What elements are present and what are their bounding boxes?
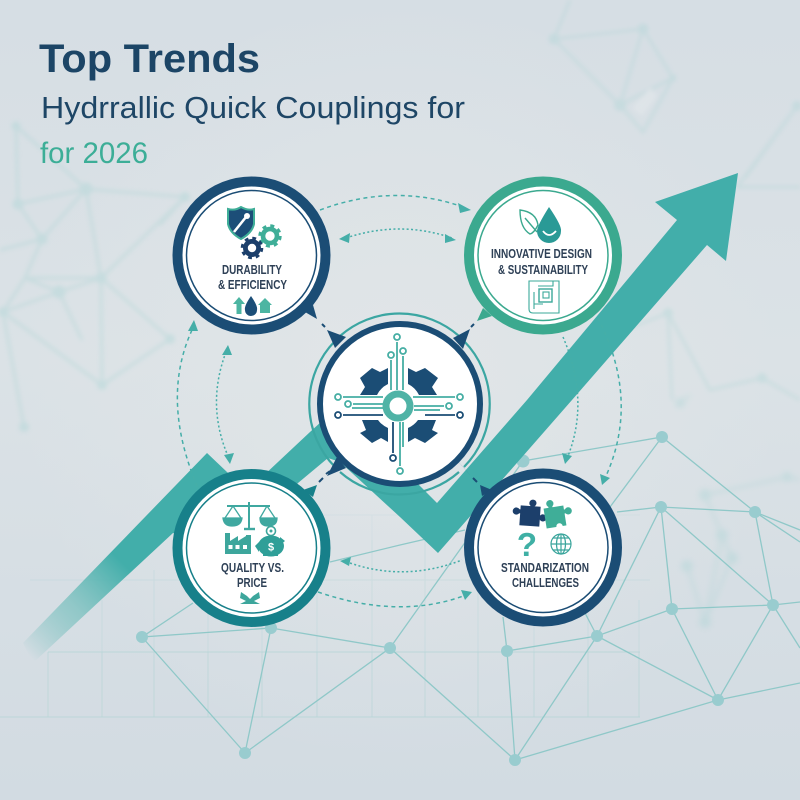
title: Top Trends xyxy=(39,37,260,81)
icon: piggy bank and coin: $ xyxy=(268,542,274,554)
panel: standardization challenges: CHALLENGES xyxy=(512,576,579,590)
panel: standardization challenges xyxy=(469,474,617,622)
icon: green puzzle piece xyxy=(542,497,574,532)
icon: question mark: ? xyxy=(517,526,537,563)
icon: blueprint chip xyxy=(529,281,559,313)
panel: central hub xyxy=(309,314,490,494)
connector tails and dashes xyxy=(303,305,492,497)
label: standardization challenges: STANDARIZATION xyxy=(501,561,589,575)
label: innovative design and sustainability: INNOVATIVE DESIGN xyxy=(491,247,592,261)
icon: piggy bank and coin xyxy=(255,526,285,556)
panel: durability and efficiency xyxy=(178,182,326,330)
panel: durability and efficiency: & EFFICIENCY xyxy=(218,278,288,292)
subtitle: Hydrrallic Quick Couplings for xyxy=(41,90,465,125)
icon: factory xyxy=(225,533,251,554)
icon: gear with circuit xyxy=(335,334,463,474)
icon: dark gear xyxy=(242,238,262,258)
background network: foreground lines xyxy=(136,431,800,766)
icon: shield with wrench xyxy=(228,207,254,239)
hub broken outer ring xyxy=(309,314,490,494)
icon: handshake xyxy=(240,592,260,604)
icon: scales xyxy=(223,502,277,529)
dashed cycle arrows xyxy=(177,195,621,607)
icon: leaf xyxy=(520,210,538,234)
panel: innovative design and sustainability: & SUSTAINABILITY xyxy=(498,263,589,277)
panel: innovative design and sustainability xyxy=(469,182,617,330)
background network: top right blurred xyxy=(548,0,800,400)
label: quality vs price: QUALITY VS. xyxy=(221,561,284,575)
background network: top left blurred xyxy=(0,122,190,432)
panel: quality vs price: PRICE xyxy=(237,576,267,590)
year: for 2026 xyxy=(40,137,148,170)
panel: quality vs price xyxy=(178,474,326,622)
icon: dark puzzle piece xyxy=(512,498,548,527)
icon: globe xyxy=(551,534,571,554)
trend arrow xyxy=(23,173,738,663)
background chart grid xyxy=(0,515,650,717)
label: durability and efficiency: DURABILITY xyxy=(222,263,283,277)
icon: water drop xyxy=(537,207,561,243)
background network: right middle blurred xyxy=(675,395,800,628)
icon: teal gear xyxy=(260,226,280,246)
icons: arrow, drop, house xyxy=(233,296,272,316)
hub spikes xyxy=(327,329,471,476)
